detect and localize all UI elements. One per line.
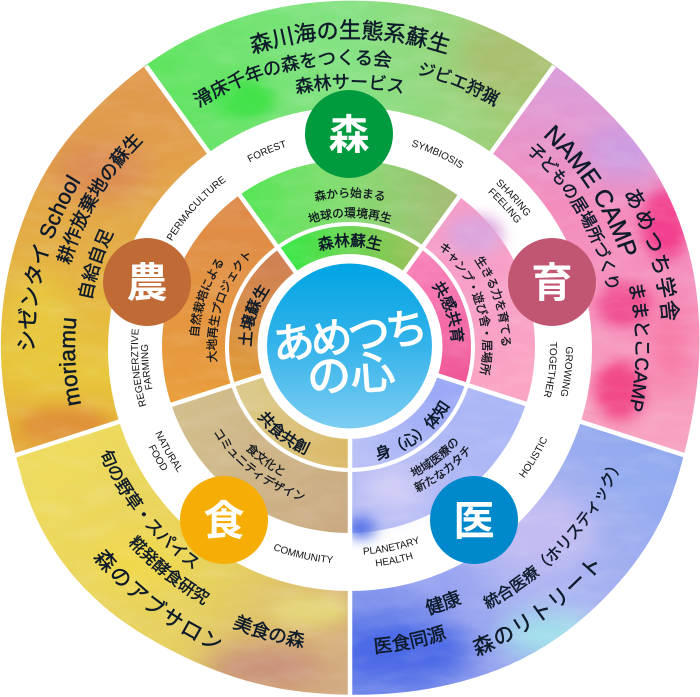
band labels: forest: FOREST bbox=[247, 140, 285, 162]
icon: medicine badge bbox=[430, 476, 518, 564]
middle ring text: food: コミュニティデザイン bbox=[214, 428, 305, 499]
band labels: nurture bbox=[488, 180, 573, 398]
outer ring text: forest: ジビエ狩猟 bbox=[419, 62, 501, 107]
outer ring text: food: 森のアブサロン bbox=[93, 548, 221, 646]
band labels: nurture: FEELING bbox=[488, 188, 520, 223]
middle ring text: medicine: 地域医療の bbox=[410, 438, 458, 476]
outer ring text: forest: 森川海の生態系蘇生 bbox=[250, 18, 450, 54]
centre: heart of ametsuchi: あめつち bbox=[270, 304, 426, 369]
band labels: food: COMMUNITY bbox=[274, 544, 334, 563]
panel: food sector bbox=[16, 378, 348, 695]
icon: forest badge: 森 bbox=[328, 112, 370, 158]
icon: agriculture badge bbox=[103, 238, 191, 326]
outer ring text: nurture: NAME CAMP bbox=[544, 124, 636, 254]
band labels: agriculture bbox=[131, 176, 226, 407]
panel: medicine sector bbox=[352, 378, 684, 695]
centre: heart of ametsuchi bbox=[258, 254, 442, 439]
outer ring text: agriculture: moriamu bbox=[53, 315, 86, 408]
outer ring text: forest bbox=[192, 18, 501, 108]
outer ring text: medicine: 統合医療（ホリスティック） bbox=[483, 468, 619, 609]
icon: nurture badge bbox=[508, 238, 596, 326]
band labels: agriculture: FARMING bbox=[139, 343, 155, 391]
middle ring text: agriculture: 大地再生プロジェクト bbox=[194, 244, 257, 367]
outer ring text: food: 糀発酵食研究 bbox=[128, 534, 210, 606]
inner ring text: agriculture: 土壌蘇生 bbox=[232, 280, 274, 351]
middle ring text: forest: 地球の環境再生 bbox=[308, 207, 392, 224]
band labels: forest: SYMBIOSIS bbox=[412, 140, 464, 168]
outer ring text: food bbox=[93, 450, 304, 648]
middle ring text: nurture: 生きる力を育てる bbox=[474, 256, 511, 346]
inner ring text: forest: 森林蘇生 bbox=[318, 232, 382, 252]
middle ring text: nurture bbox=[440, 243, 511, 376]
band labels: agriculture: PERMACULTURE bbox=[162, 171, 230, 245]
outer ring text: medicine: 健康 bbox=[426, 590, 462, 616]
middle ring text: food: 食文化と bbox=[246, 444, 285, 476]
centre: heart of ametsuchi: の心 bbox=[305, 348, 397, 403]
band labels: food bbox=[148, 430, 334, 563]
outer ring text: medicine bbox=[374, 468, 619, 656]
icon: medicine badge: 医 bbox=[454, 498, 494, 544]
outer ring text: agriculture: 耕作放棄地の蘇生 bbox=[45, 124, 148, 270]
band labels: agriculture: REGENERZTIVE bbox=[127, 327, 149, 408]
outer ring text: agriculture: シゼンタイ School bbox=[2, 168, 87, 358]
outer ring text: agriculture: 自給自足 bbox=[73, 225, 118, 303]
middle ring text: nurture: キャンプ・遊び舎・居場所 bbox=[440, 243, 493, 376]
panel: forest sector bbox=[145, 0, 555, 270]
band labels: medicine: HEALTH bbox=[376, 552, 413, 566]
icon: food badge: 食 bbox=[204, 498, 244, 544]
outer ring text: forest: 森林サービス bbox=[296, 74, 402, 94]
icon: agriculture badge: 農 bbox=[126, 260, 168, 306]
middle ring text: agriculture bbox=[188, 253, 250, 362]
middle ring text: medicine: 新たなカタチ bbox=[414, 446, 469, 492]
middle ring text: forest: 森から始まる bbox=[314, 187, 384, 202]
icon: food badge bbox=[180, 476, 268, 564]
middle ring text: forest bbox=[308, 187, 392, 224]
outer ring text: food: 旬の野草・スパイス bbox=[101, 450, 198, 569]
band labels: nurture: SHARING bbox=[496, 180, 530, 216]
icon: forest badge bbox=[305, 90, 393, 178]
outer ring text: agriculture bbox=[17, 134, 144, 406]
outer ring text: nurture: あめつち学舎 bbox=[625, 188, 680, 320]
panel: nurture sector bbox=[406, 66, 700, 453]
band labels: nurture: TOGETHER bbox=[544, 342, 557, 398]
band labels: medicine bbox=[364, 437, 547, 566]
outer ring text: nurture: 子どもの居場所づくり bbox=[529, 143, 618, 288]
inner ring text: food: 共食共創 bbox=[257, 412, 311, 455]
inner ring text: medicine: 身（心）体知 bbox=[376, 400, 450, 461]
band labels: food: FOOD bbox=[148, 444, 167, 470]
outer ring text: forest: 滑床千年の森をつくる会 bbox=[192, 48, 392, 108]
outer ring text: food: 美食の森 bbox=[232, 614, 304, 648]
band labels: food: NATURAL bbox=[156, 430, 182, 472]
outer ring text: nurture bbox=[529, 124, 680, 412]
middle ring text: agriculture: 自然栽培による bbox=[183, 254, 228, 340]
outer ring text: nurture: ままとこCAMP bbox=[629, 284, 650, 412]
band labels: forest bbox=[247, 140, 464, 168]
icon: nurture badge: 育 bbox=[532, 260, 572, 306]
inner ring text: nurture: 共感共育 bbox=[432, 281, 465, 342]
outer ring text: medicine: 医食同源 bbox=[374, 624, 447, 654]
outer ring text: medicine: 森のリトリート bbox=[472, 562, 598, 656]
band labels: nurture: GROWING bbox=[560, 347, 573, 396]
band labels: medicine: PLANETARY bbox=[364, 536, 418, 554]
band labels: medicine: HOLISTIC bbox=[519, 437, 547, 478]
panel: agriculture sector bbox=[0, 66, 294, 453]
